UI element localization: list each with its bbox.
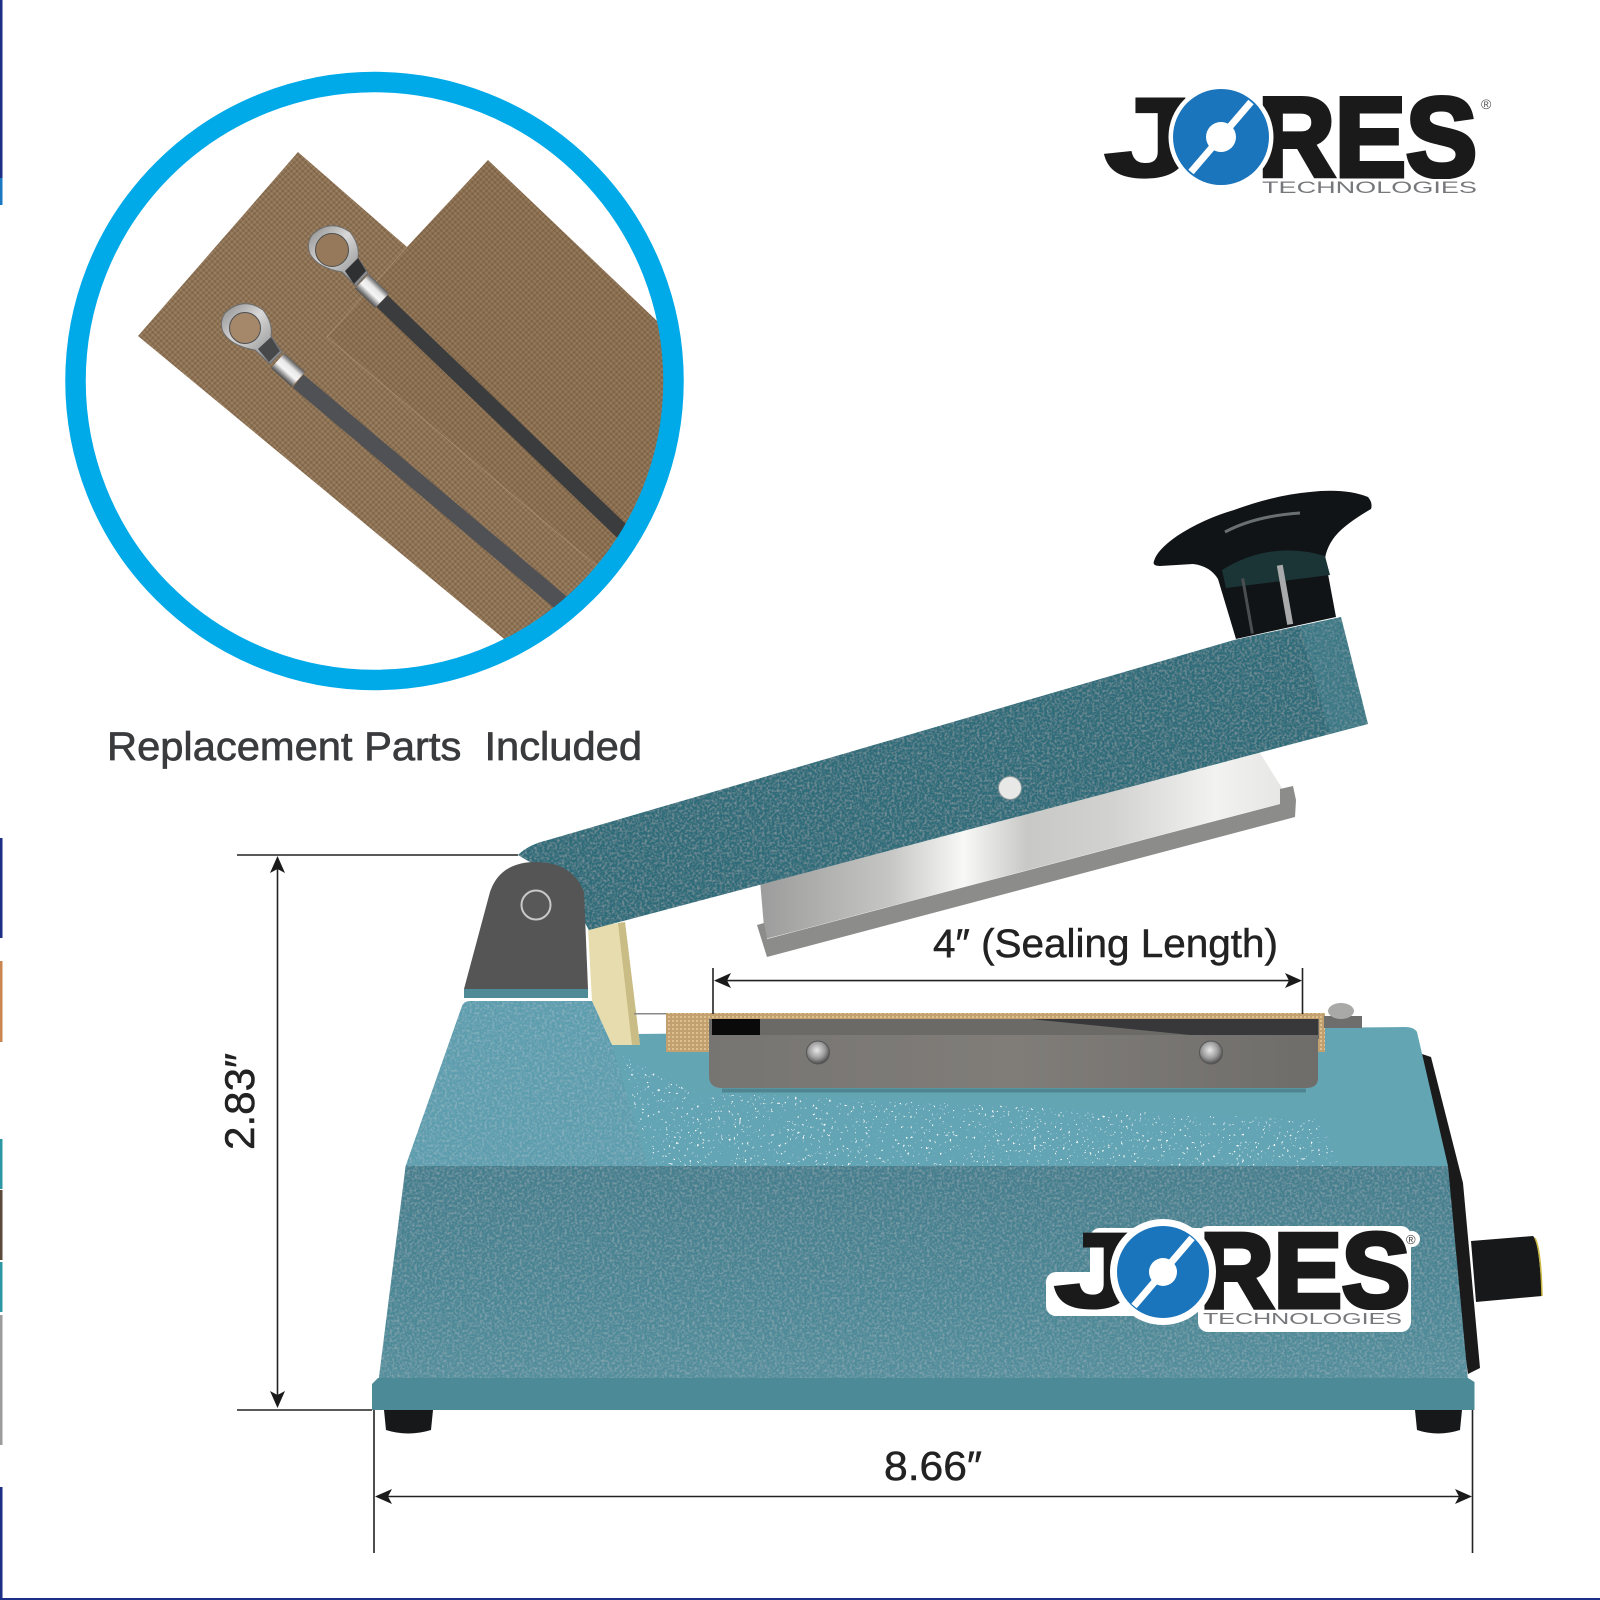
dimension: width 8.66 inches: 8.66″ (884, 1443, 982, 1489)
terminal bolt (1324, 1003, 1362, 1028)
upper arm (518, 617, 1368, 930)
logo emblem (1168, 84, 1274, 190)
panel: replacement parts circle (76, 82, 700, 700)
dimension: width 8.66 inches (374, 1410, 1472, 1553)
sealing jaw dark slot (709, 1019, 1319, 1039)
dimension: 4 inch sealing length: 4″ (Sealing Length) (933, 922, 1278, 966)
logo: Jores Technologies header: ® (1481, 96, 1492, 112)
product: impulse sealer (372, 491, 1542, 1434)
arm end highlight (1300, 617, 1368, 734)
logo: Jores sticker on base: TECHNOLOGIES (1203, 1311, 1402, 1328)
handle knob (1154, 491, 1372, 639)
arm pin (998, 776, 1022, 800)
blue ring (76, 82, 674, 680)
pivot plate (464, 862, 588, 998)
logo: Jores Technologies header: RES (1258, 75, 1477, 200)
logo: Jores sticker on base: RES (1200, 1212, 1410, 1330)
plate screws (806, 1041, 1222, 1064)
dimension: 4 inch sealing length (713, 922, 1302, 1014)
temperature dial (1471, 1236, 1542, 1302)
logo: Jores Technologies header: TECHNOLOGIES (1262, 178, 1477, 197)
heating wire: lower (221, 304, 572, 612)
base front face (379, 1166, 1468, 1380)
base flange (372, 1378, 1474, 1410)
heating wire: upper (308, 226, 632, 541)
cream support post (588, 922, 668, 1045)
replacement PTFE cloth strips (138, 152, 664, 639)
top surface speckle (620, 1052, 1340, 1166)
rear feet (384, 1410, 1462, 1434)
logo: Jores sticker on base (1046, 1211, 1420, 1332)
dimension: height 2.83 inches (216, 855, 518, 1410)
right side control panel (1422, 1054, 1480, 1374)
logo: Jores sticker on base: J (1054, 1211, 1138, 1330)
seal blade (upper jaw) (757, 745, 1296, 957)
caption: replacement parts: Replacement Parts Included (107, 725, 642, 769)
logo: Jores sticker on base: ® (1406, 1232, 1416, 1247)
logo: Jores Technologies header (1104, 75, 1492, 200)
logo: Jores Technologies header: J (1104, 75, 1194, 200)
steel sealing plate (709, 1035, 1318, 1090)
heating bar cloth (666, 1013, 1325, 1052)
dimension: height 2.83 inches: 2.83″ (216, 1053, 263, 1150)
base top surface (610, 1027, 1448, 1166)
left tower (406, 1001, 648, 1166)
